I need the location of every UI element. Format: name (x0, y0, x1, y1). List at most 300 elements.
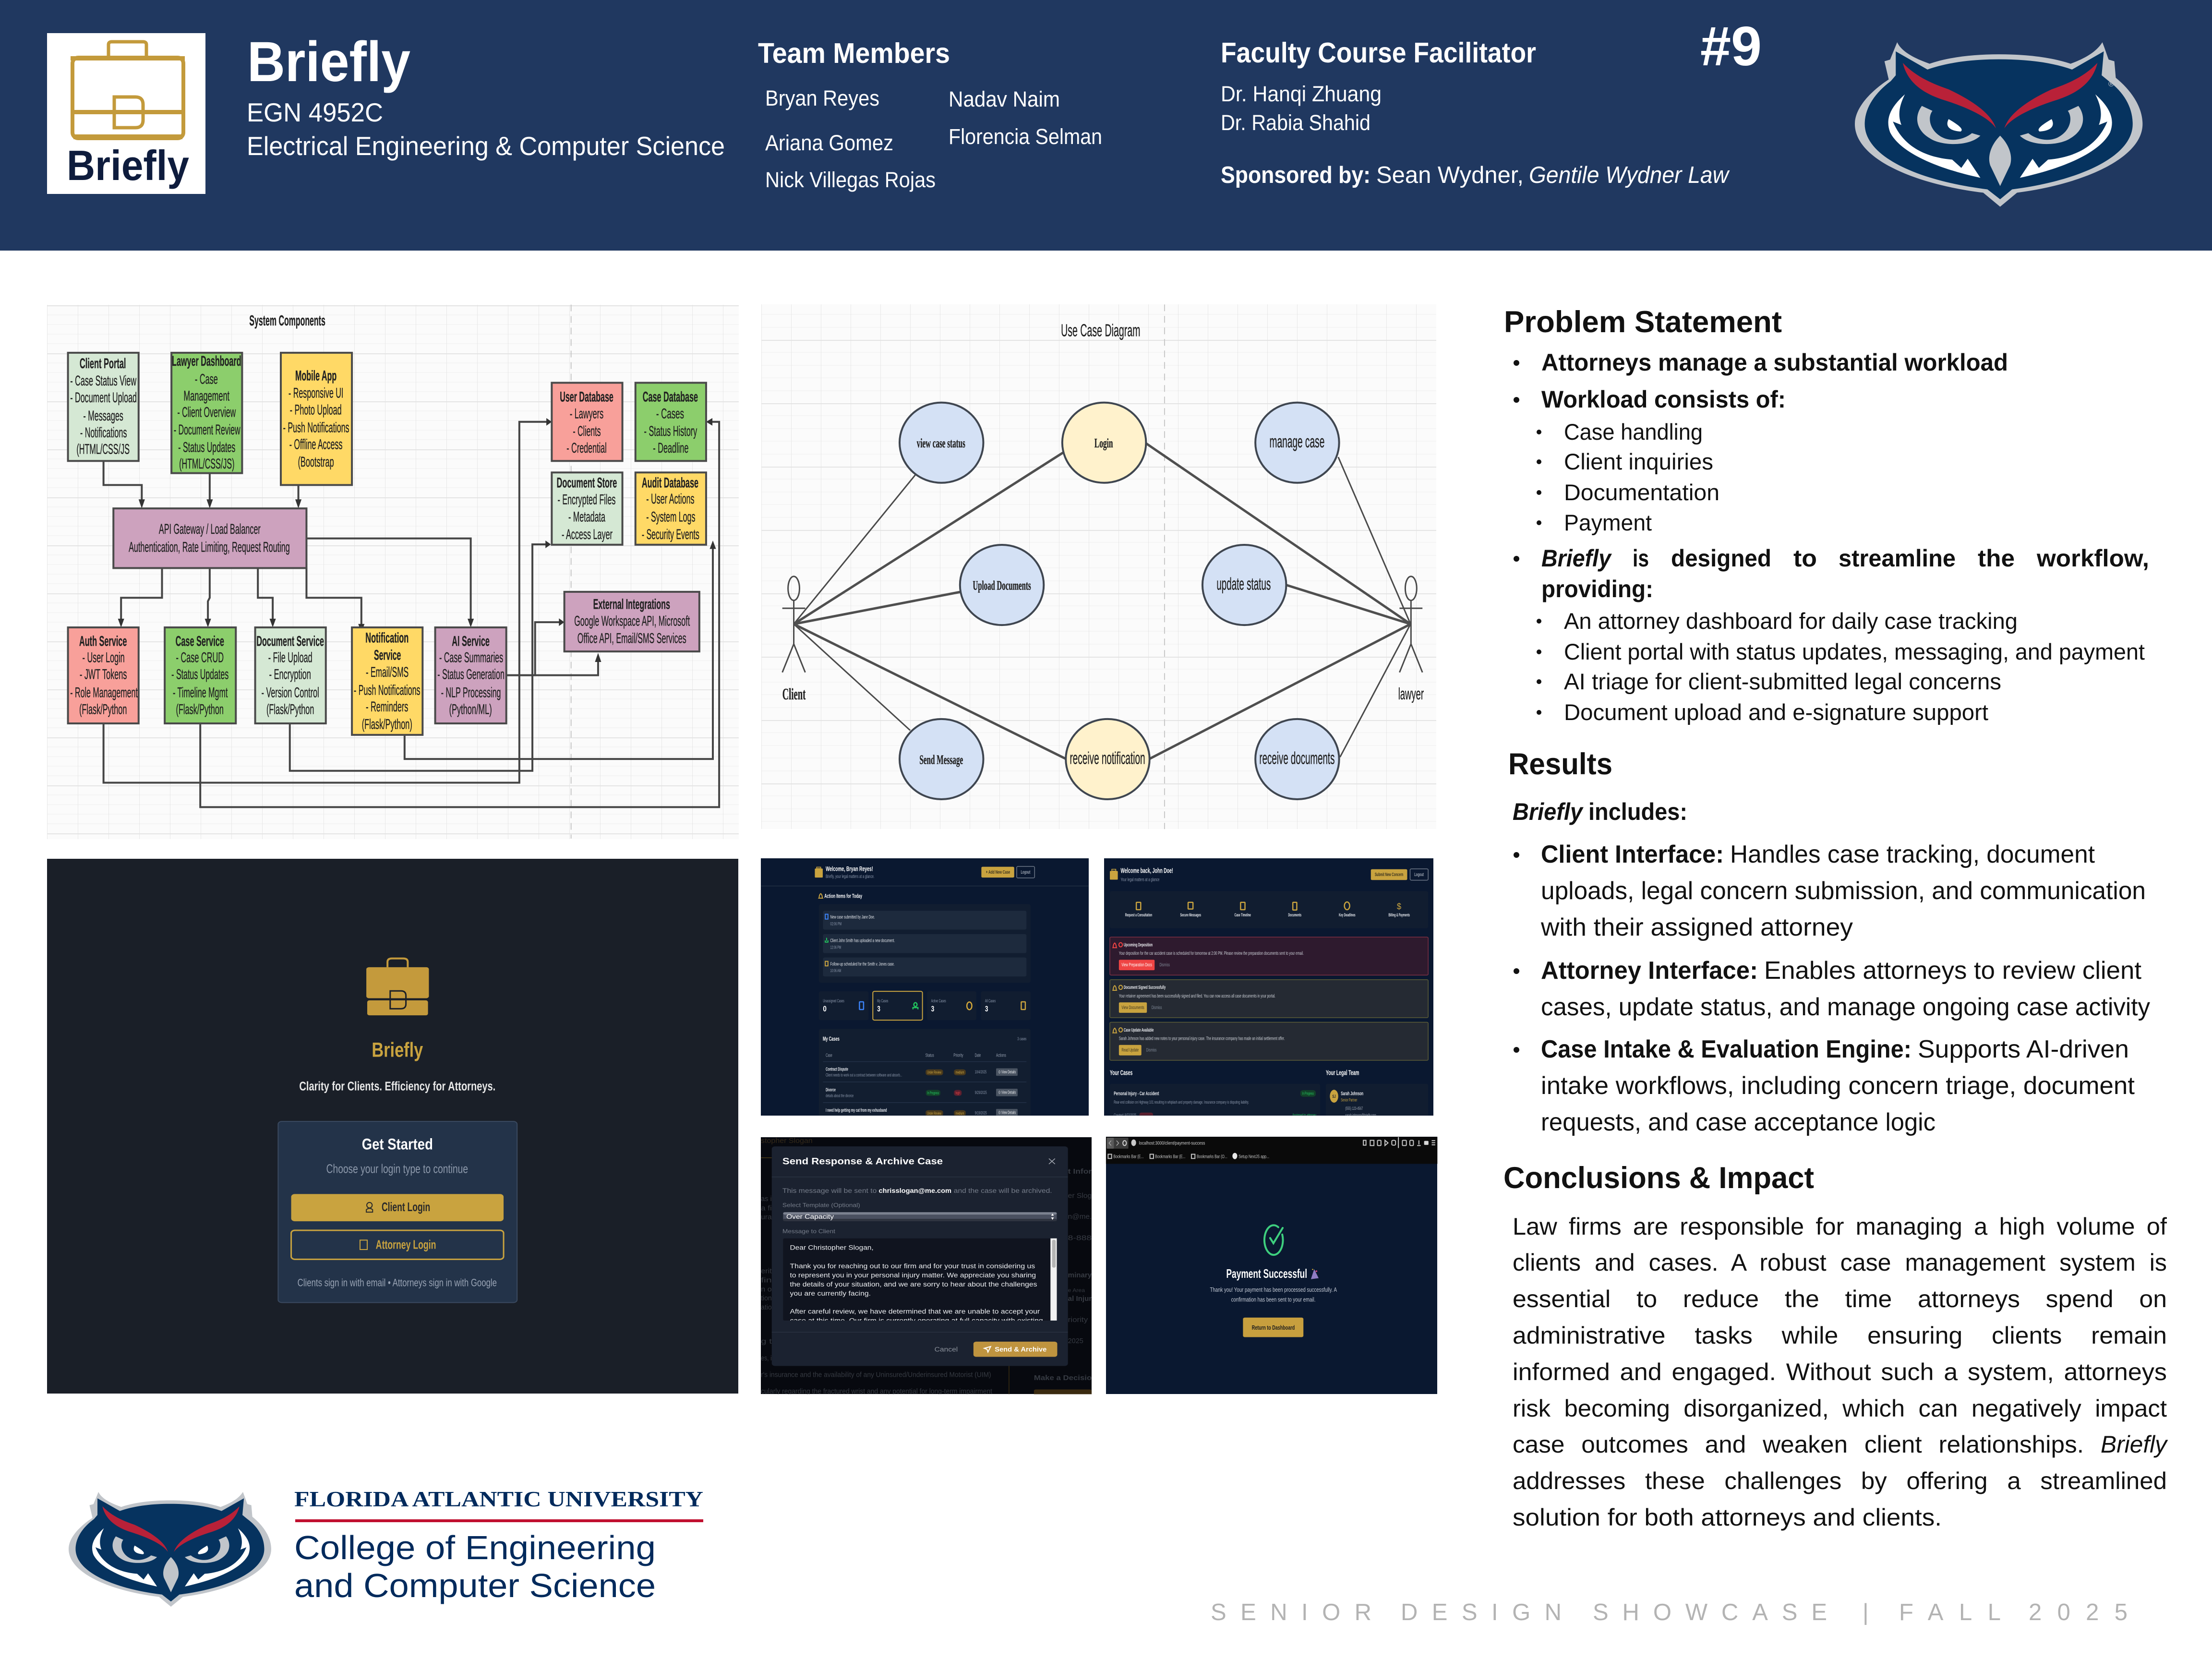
use case: Login: Login (1094, 436, 1113, 450)
stat cards: Unassigned Cases (823, 998, 844, 1004)
dimmed background page: 2025 (1068, 1337, 1083, 1345)
section: results (1508, 747, 2150, 1136)
dimmed background page: as i (761, 1195, 772, 1202)
client header: Your legal matters at a glance (1121, 878, 1159, 882)
connector arrows (104, 418, 719, 807)
team members: Florencia Selman (949, 124, 1102, 149)
conclusions paragraph: solution for both attorneys and clients. (1513, 1504, 1942, 1531)
dimmed background page: r's insurance and the availability of any Uninsured/Underinsured Motorist (UIM) (761, 1371, 991, 1379)
sub-bullets: features: An attorney dashboard for daily case tracking (1564, 608, 2018, 634)
box: Notification Service: Notification (365, 630, 409, 646)
course code and department: EGN 4952C (247, 97, 383, 127)
button: Attorney Login (291, 1230, 504, 1259)
bullet: Case Intake and Evaluation Engine: intake workflows, including concern triage, document (1541, 1072, 2135, 1100)
bullet: Attorney Interface: Enables attorneys to review client (1764, 957, 2142, 985)
legal team card: Sarah Johnson (1341, 1091, 1363, 1096)
sub-bullets: workload items: Client inquiries (1564, 449, 1713, 474)
box: User Database: - Clients (573, 423, 601, 439)
box: Notification Service: - Email/SMS (366, 664, 409, 680)
box: Auth Service: - User Login (83, 650, 125, 666)
bullet: Briefly streamlines workflow: Briefly (1541, 545, 1612, 572)
box: Client Portal (68, 353, 139, 461)
use case: Send Message (900, 719, 983, 799)
my cases table: high (956, 1091, 960, 1095)
bullet: Briefly streamlines workflow (1514, 545, 2149, 602)
box: Auth Service: (Flask/Python (79, 701, 127, 717)
message textarea: After careful review, we have determined that we are unable to accept your (790, 1308, 1040, 1315)
quick action tiles: Request a Consultation (1125, 913, 1152, 917)
panel: system components diagram: - Case Status View (70, 373, 136, 389)
panel: attorney dashboard screenshot (761, 858, 1089, 1117)
panel: system components diagram: - NLP Processing (441, 685, 501, 700)
icon: success check (1264, 1225, 1283, 1255)
dimmed background page: a fi (761, 1204, 772, 1212)
action items list: 10:06 AM (830, 968, 841, 974)
bullet: Client Interface (1514, 841, 2146, 941)
box: Notification Service (352, 627, 422, 735)
modal dialog: and the case will be archived. (954, 1188, 1052, 1195)
conclusions paragraph: risk becoming disorganized, which can negatively impact (1513, 1395, 2167, 1422)
intro line: Briefly (1513, 798, 1584, 825)
icon: FAU owl: ® (2108, 80, 2114, 88)
box: Case Database: - Deadline (653, 440, 688, 456)
sponsor line: Sponsored by: (1221, 162, 1370, 188)
my cases table: medium (956, 1070, 964, 1074)
bullet: Case Intake and Evaluation Engine: Supports AI-driven (1918, 1035, 2129, 1063)
faculty course facilitator (1221, 37, 1536, 135)
box: Notification Service: - Reminders (366, 699, 408, 715)
use case: manage case (1255, 403, 1339, 483)
use case: view case status: view case status (917, 436, 965, 450)
panel: system components diagram: - Encrypted Files (558, 492, 616, 507)
box: Mobile App: Mobile App (295, 368, 337, 384)
sponsor line: Gentile Wydner Law (1529, 162, 1730, 188)
box: API Gateway: API Gateway / Load Balancer (159, 521, 261, 537)
faculty course facilitator: Dr. Rabia Shahid (1221, 110, 1370, 135)
box: Document Service: - Encryption (269, 667, 311, 683)
my cases table: Under Review (927, 1070, 941, 1074)
box: User Database: - Lawyers (570, 406, 603, 421)
panel: system components diagram: - Timeline Mgmt (173, 685, 228, 700)
stat cards: 0 (823, 1004, 827, 1013)
box: Client Portal: - Messages (83, 408, 123, 424)
legal team card: SJ (1332, 1094, 1336, 1099)
box: User Database: - Credential (566, 440, 607, 456)
project title: Briefly (247, 30, 410, 94)
use case: update status (1202, 545, 1286, 625)
association lines (794, 444, 1410, 759)
browser chrome bar: localhost:3000/client/payment-success (1139, 1140, 1205, 1146)
use case: Send Message: Send Message (919, 752, 963, 767)
dimmed background page: g t (761, 1337, 772, 1345)
panel: system components diagram: - Client Overview (177, 405, 236, 421)
modal dialog: Send Response & Archive Case (782, 1155, 943, 1166)
sponsor line (1221, 162, 1730, 188)
panel: system components diagram: Audit Database (642, 475, 698, 491)
panel: system components diagram: - Status Updates (171, 667, 228, 683)
legal team card: sarah.johnson@briefly.com (1345, 1113, 1376, 1118)
my cases table (823, 1037, 1026, 1116)
box: Auth Service: - JWT Tokens (80, 667, 127, 683)
team members: Nick Villegas Rojas (765, 168, 936, 192)
bullet: Briefly streamlines workflow: workflow, (2036, 545, 2149, 572)
bullet: Client Interface: with their assigned attorney (1540, 914, 1853, 941)
sub-bullets: features: Document upload and e-signature support (1564, 699, 1988, 725)
bullet: Briefly streamlines workflow: to (1793, 545, 1817, 572)
tagline: Clarity for Clients. Efficiency for Attorneys. (299, 1080, 495, 1094)
alert: document signed: Your retainer agreement has been successfully signed and filed. You can now access all case documents in your portal. (1119, 994, 1275, 999)
dimmed background page: tion (761, 1294, 772, 1302)
browser chrome bar: Bookmarks Bar (E... (1113, 1154, 1143, 1159)
box: Audit Database: - User Actions (646, 491, 695, 507)
box: AI Service (435, 627, 506, 723)
box: External Integrations: External Integrations (593, 596, 670, 612)
panel: system components diagram: Lawyer Dashboard (172, 353, 241, 369)
panel: system components diagram: (HTML/CSS/JS) (179, 456, 234, 472)
alert: upcoming deposition: Dismiss (1159, 962, 1170, 968)
message textarea: Thank you for reaching out to our firm and for your trust in considering us (790, 1263, 1035, 1270)
stat cards: 3 (985, 1004, 988, 1013)
bullet: Briefly streamlines workflow: streamline (1839, 545, 1956, 572)
use case: view case status (900, 403, 983, 483)
sub-bullets: workload items: Case handling (1564, 419, 1703, 445)
confirmation message (1210, 1286, 1337, 1303)
box: Lawyer Dashboard (171, 353, 242, 473)
panel: system components diagram: - Role Management (70, 685, 138, 700)
sponsor line: Sean Wydner, (1376, 162, 1524, 188)
my cases table: I need help getting my cat from my exhusband (826, 1108, 887, 1113)
panel: send response modal screenshot (761, 1137, 1092, 1396)
box: Document Store: - Access Layer (562, 527, 613, 542)
panel: use case diagram: Use Case Diagram (1061, 321, 1140, 340)
my cases table: In Progress (927, 1091, 939, 1095)
footer: showcase tag: 2025 (2029, 1599, 2128, 1625)
panel: system components diagram: - Case Summaries (439, 650, 503, 666)
template select: Over Capacity (786, 1214, 834, 1220)
panel: use case diagram: lawyer (1398, 685, 1424, 703)
dimmed background page: es, i (761, 1354, 772, 1362)
quick action tiles: Billing & Payments (1388, 913, 1410, 917)
alert: case update: Sarah Johnson has added new notes to your personal injury case. The insurance company has made an initial settlement offer. (1119, 1036, 1285, 1041)
logo: FAU College of Engineering (69, 1487, 703, 1607)
box: AI Service: AI Service (452, 634, 490, 649)
faculty course facilitator: Dr. Hanqi Zhuang (1221, 82, 1382, 106)
sub-bullets: workload items: Documentation (1564, 480, 1719, 505)
bullets: workload: Attorneys manage a substantial workload (1541, 349, 2008, 376)
panel: system components diagram: User Database (560, 389, 613, 405)
my cases table: Divorce (826, 1088, 836, 1093)
dimmed background page: t Infor (1068, 1167, 1092, 1176)
panel: system components diagram: - Status Generation (437, 667, 505, 683)
my cases table: Under Review (927, 1111, 941, 1116)
action items list: Action Items for Today (824, 893, 862, 900)
panel: system components diagram: - Document Review (174, 422, 240, 438)
dashboard header: Logout (1021, 869, 1030, 875)
panel: system components diagram: - Security Events (642, 527, 699, 542)
dimmed background page: riority (1068, 1316, 1088, 1324)
confirmation message: confirmation has been sent to your email. (1231, 1297, 1315, 1303)
client header: Welcome back, John Doe! (1121, 866, 1173, 875)
team members: Team Members (758, 37, 950, 69)
team members (758, 37, 1102, 192)
heading: Conclusions & Impact: Conclusions & Impact (1503, 1161, 1814, 1195)
my cases table: Contract Dispute (826, 1067, 848, 1072)
action items list (819, 893, 1031, 983)
modal dialog: Select Template (Optional) (782, 1202, 860, 1209)
login card (278, 1121, 517, 1302)
college name: College of Engineering (294, 1529, 656, 1566)
dimmed background page: n@me. (1068, 1213, 1092, 1220)
box: Audit Database (636, 472, 706, 545)
box: Notification Service: (Flask/Python) (362, 717, 412, 733)
use case: Login (1062, 403, 1146, 483)
conclusions paragraph: Briefly (2101, 1431, 2168, 1458)
use case: Upload Documents (960, 545, 1044, 625)
box: Client Portal: - Notifications (80, 425, 127, 441)
my cases table: Case (826, 1053, 832, 1058)
my cases table: Date (975, 1053, 981, 1058)
bullets: workload (1514, 349, 2008, 413)
box: Case Service: - Case CRUD (176, 650, 224, 666)
alert: case update (1110, 1022, 1428, 1060)
box: Mobile App (281, 353, 352, 485)
my cases table: details about the divorce (826, 1094, 854, 1098)
box: API Gateway (113, 508, 306, 568)
box: Auth Service: Auth Service (79, 634, 127, 649)
button: Client Login: Client Login (382, 1200, 430, 1214)
browser chrome bar: Bookmarks Bar (E... (1155, 1154, 1186, 1159)
your cases card: Personal Injury - Car Accident (1114, 1091, 1159, 1096)
box: Document Service: (Flask/Python (266, 701, 314, 717)
icon: briefcase (366, 959, 429, 1015)
panel: system components diagram (47, 305, 739, 839)
conclusions paragraph: Law firms are responsible for managing a high volume of (1513, 1213, 2167, 1240)
box: Case Database: - Cases (656, 406, 684, 421)
box: Case Service (165, 627, 236, 723)
dashboard header: + Add New Case (986, 869, 1010, 875)
my cases table: Priority (953, 1053, 963, 1058)
bullet: Briefly streamlines workflow: the (1978, 545, 2015, 572)
quick action tiles: Secure Messages (1180, 913, 1201, 917)
button: Send & Archive: Send & Archive (995, 1346, 1046, 1353)
panel: system components diagram: - Push Notifications (283, 420, 349, 436)
action items list: Client John Smith has uploaded a new document. (830, 938, 895, 943)
my cases table: ⊙ View Details (998, 1070, 1016, 1075)
bullet: Attorney Interface: Attorney Interface: (1541, 957, 1758, 985)
panel: system components diagram: Document Service (256, 634, 324, 649)
box: Notification Service: Service (374, 648, 401, 663)
conclusions paragraph: essential to reduce the time attorneys spend on (1513, 1286, 2167, 1312)
bullets: workload: Workload consists of: (1541, 386, 1786, 413)
section: problem statement (1504, 305, 2149, 725)
action items list: 02:06 PM (830, 922, 842, 926)
my cases table: ⊙ View Details (998, 1110, 1016, 1115)
your cases card: Rear-end collision on Highway 101 resulting in whiplash and property damage. Insurance company is disputing liability. (1114, 1100, 1249, 1105)
action items list: 12:06 PM (830, 945, 841, 950)
icon: FAU owl (69, 1492, 271, 1607)
poster number: #9 (1700, 15, 1762, 77)
modal dialog: Message to Client (782, 1228, 835, 1235)
bullet: Attorney Interface: cases, update status, and manage ongoing case activity (1541, 993, 2150, 1021)
my cases table: ⊙ View Details (998, 1090, 1016, 1095)
box: Document Service: - File Upload (268, 650, 313, 666)
box: Client Portal: Client Portal (80, 356, 126, 372)
team members: Bryan Reyes (765, 86, 879, 110)
box: Case Database (636, 383, 706, 461)
panel: system components diagram: Case Database (643, 389, 698, 405)
alert: upcoming deposition: Upcoming Deposition (1124, 942, 1153, 948)
use case: manage case: manage case (1270, 432, 1324, 451)
sub-bullets: workload items: Payment (1564, 510, 1652, 535)
quick action tiles: $ (1397, 902, 1401, 912)
team members: Nadav Naim (949, 87, 1060, 111)
bullet: Case Intake and Evaluation Engine: requests, and case acceptance logic (1541, 1108, 1936, 1136)
alert: upcoming deposition: View Preparation Docs (1121, 962, 1152, 968)
panel: system components diagram: (HTML/CSS/JS (76, 442, 130, 457)
my cases table: 9/19/2025 (975, 1111, 987, 1116)
legal team card: Senior Partner (1341, 1098, 1358, 1103)
alert: upcoming deposition (1110, 937, 1428, 975)
panel: system components diagram: - Version Control (262, 685, 319, 700)
box: Lawyer Dashboard: Management (184, 388, 229, 404)
footer: showcase tag: | (1863, 1599, 1869, 1625)
dimmed background page: 8-888 (1068, 1234, 1092, 1242)
footer: showcase tag: FALL (1899, 1599, 2001, 1625)
conclusions paragraph: clients and cases. A robust case management system is (1513, 1249, 2167, 1276)
actor: Client (782, 577, 805, 703)
bullet: Client Interface: Client Interface: (1541, 841, 1724, 868)
dimmed background page: atio (761, 1303, 772, 1311)
bullet: Client Interface: Handles case tracking, document (1730, 841, 2095, 868)
client header: Logout (1414, 872, 1424, 878)
box: Document Store: - Metadata (568, 509, 605, 525)
browser chrome bar (1106, 1137, 1437, 1164)
stat cards: 3 (931, 1004, 934, 1013)
dimmed background page: minary (1068, 1271, 1092, 1279)
box: Mobile App: - Photo Upload (290, 402, 342, 418)
sub-bullets: features: Client portal with status updates, messaging, and payment (1564, 639, 2145, 664)
dimmed background page: cularly regarding the fractured wrist and any potential for long-term impairment (761, 1387, 992, 1395)
section: conclusions and impact (1503, 1161, 2168, 1531)
box: Case Service: (Flask/Python (176, 701, 224, 717)
button: Return to Dashboard (1243, 1318, 1303, 1337)
panel: system components diagram: - Offline Access (289, 437, 342, 452)
panel: payment success screenshot (1106, 1137, 1437, 1394)
my cases table: Actions (996, 1053, 1006, 1058)
dimmed background page: stopher Slogan (761, 1137, 813, 1144)
dashboard header: Welcome, Bryan Reyes! (826, 866, 873, 873)
quick action tiles: Documents (1288, 913, 1301, 917)
stat cards: My Cases (877, 998, 888, 1004)
dimmed background page (761, 1137, 1092, 1396)
login card: Get Started (362, 1136, 433, 1153)
box: Mobile App: (Bootstrap (298, 454, 334, 470)
conclusions paragraph: informed and engaged. Without such a system, attorneys (1513, 1358, 2167, 1385)
university name: FLORIDA ATLANTIC UNIVERSITY (294, 1487, 703, 1511)
bullet: Case Intake and Evaluation Engine (1514, 1035, 2135, 1136)
alert: case update: Dismiss (1146, 1048, 1157, 1053)
footer: showcase tag: SHOWCASE (1593, 1599, 1827, 1625)
panel: system components diagram: Document Store (557, 475, 617, 491)
footer: showcase tag (1211, 1599, 2128, 1625)
dimmed background page: Make a Decisio (1034, 1374, 1092, 1382)
dimmed background page: fin (761, 1276, 772, 1284)
panel: system components diagram: - Status Updates (178, 439, 235, 455)
bullet: Briefly streamlines workflow: designed (1671, 545, 1771, 572)
login card: Clients sign in with email • Attorneys sign in with Google (298, 1277, 497, 1288)
dimmed background page: erit (761, 1267, 772, 1275)
alert: upcoming deposition: Your deposition for the car accident case is scheduled for tomorrow at 2:00 PM. Please review the preparation documents sent to your email. (1119, 951, 1304, 956)
bullet: Client Interface: uploads, legal concern submission, and communication (1541, 877, 2146, 905)
your cases card: Created: 9/22/2025 (1114, 1113, 1136, 1118)
client header: Submit New Concern (1375, 872, 1403, 878)
stat cards: 3 (877, 1004, 880, 1013)
stat cards: All Cases (985, 998, 996, 1004)
legal team card: (555) 123-4567 (1345, 1106, 1363, 1111)
client header (1110, 866, 1428, 882)
heading: Results: Results (1508, 747, 1612, 781)
dimmed background page: n o (761, 1286, 772, 1293)
faculty course facilitator: Faculty Course Facilitator (1221, 37, 1536, 69)
bullet: Attorney Interface (1514, 957, 2150, 1021)
dimmed background page: al Injur (1068, 1295, 1092, 1302)
use case: update status: update status (1216, 574, 1271, 593)
quick action tiles (1125, 902, 1410, 917)
box: Lawyer Dashboard: - Case (195, 372, 218, 387)
team members: Ariana Gomez (765, 131, 893, 155)
alert: case update: Read Update (1121, 1048, 1139, 1053)
message textarea: Dear Christopher Slogan, (790, 1245, 874, 1251)
modal dialog: chrisslogan@me.com (879, 1188, 951, 1195)
box: User Database (552, 383, 623, 461)
your cases card: Your Cases (1110, 1069, 1132, 1077)
course code and department: Electrical Engineering & Computer Science (247, 131, 725, 161)
icon: FAU owl (1855, 42, 2142, 207)
panel: use case diagram: receive documents (1259, 748, 1334, 768)
box: Auth Service (68, 627, 139, 723)
dimmed background page: e Area (1068, 1287, 1085, 1293)
alert: document signed (1110, 980, 1428, 1018)
button: Send & Archive (974, 1342, 1057, 1357)
bullet: Briefly streamlines workflow: providing: (1541, 576, 1653, 602)
panel: login screen screenshot (47, 859, 738, 1394)
modal dialog: This message will be sent to (782, 1188, 877, 1195)
template select (783, 1212, 1057, 1221)
conclusions paragraph: administrative tasks while ensuring clients remain (1513, 1322, 2167, 1349)
box: AI Service: (Python/ML) (449, 701, 492, 717)
button: Client Login (291, 1194, 504, 1221)
footer: showcase tag: DESIGN (1401, 1599, 1562, 1625)
sub-bullets: workload items (1537, 419, 1719, 535)
message textarea (783, 1238, 1057, 1324)
quick action tiles: Key Deadlines (1339, 913, 1356, 917)
dashboard header (815, 866, 1034, 879)
panel: system components diagram: System Components (249, 313, 325, 329)
course code and department (247, 97, 725, 161)
dashboard header: Briefly, your legal matters at a glance. (826, 874, 875, 879)
college name: and Computer Science (294, 1567, 656, 1604)
heading: Problem Statement: Problem Statement (1504, 305, 1782, 339)
your cases card (1110, 1069, 1320, 1119)
my cases table: 3 cases (1017, 1037, 1026, 1042)
browser chrome bar: Setup NextJS app... (1238, 1154, 1269, 1159)
intro line: includes: (1588, 798, 1687, 825)
browser chrome bar: Bookmarks Bar (O... (1197, 1154, 1227, 1159)
college name (294, 1529, 656, 1604)
login card: Choose your login type to continue (326, 1162, 468, 1176)
sub-bullets: features: AI triage for client-submitted legal concerns (1564, 669, 2001, 694)
button: Return to Dashboard: Return to Dashboard (1252, 1324, 1295, 1331)
